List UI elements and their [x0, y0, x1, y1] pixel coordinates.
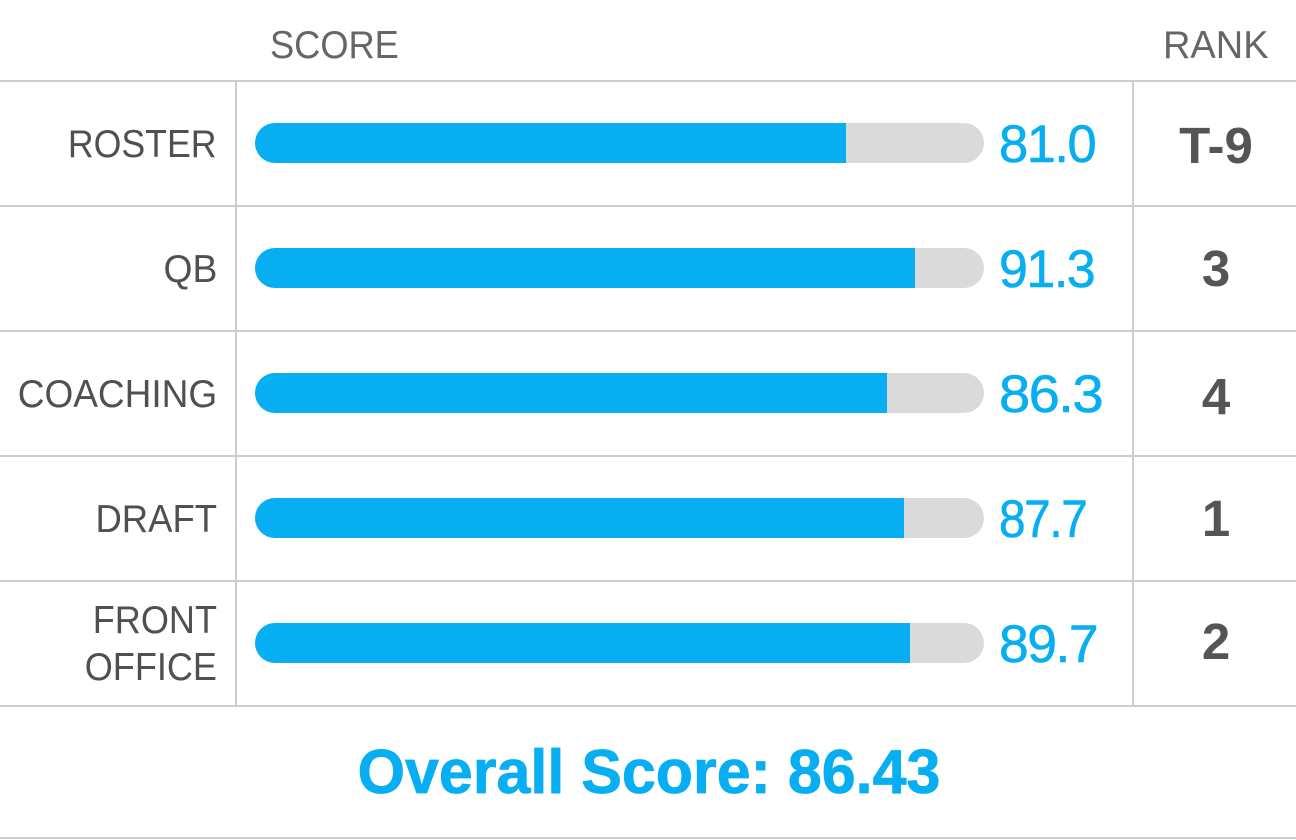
bar: coaching score 86.3	[255, 373, 984, 413]
rank: draft: 1	[1202, 490, 1230, 547]
bar: front office score 89.7	[255, 623, 984, 663]
row: front office	[85, 599, 1230, 689]
value: front office score: 89.7	[999, 615, 1097, 674]
row: draft	[95, 490, 1230, 549]
bar: draft score 87.7	[255, 498, 984, 538]
row: roster	[68, 115, 1253, 174]
label: draft: DRAFT	[95, 498, 217, 541]
rank: coaching: 4	[1202, 368, 1230, 425]
label: front office	[85, 599, 217, 689]
rank: front office: 2	[1202, 613, 1230, 670]
rank: qb: 3	[1202, 240, 1230, 297]
bar: qb score 91.3	[255, 248, 984, 288]
overall score: Overall Score: 86.43	[358, 738, 940, 807]
label: front office: FRONT	[93, 599, 217, 642]
label: roster: ROSTER	[68, 123, 217, 166]
row: coaching	[18, 365, 1230, 425]
value: roster score: 81.0	[999, 115, 1095, 174]
rank: roster: T-9	[1179, 117, 1253, 174]
bar: roster score 81.0	[255, 123, 984, 163]
heading: rank column: RANK	[1163, 24, 1269, 67]
label: qb: QB	[163, 248, 217, 291]
value: qb score: 91.3	[999, 240, 1094, 299]
row: qb	[163, 240, 1230, 299]
value: draft score: 87.7	[999, 490, 1086, 549]
label: front office: OFFICE	[85, 646, 217, 689]
label: coaching: COACHING	[18, 373, 217, 416]
value: coaching score: 86.3	[999, 365, 1102, 424]
heading: score column: SCORE	[270, 24, 399, 67]
